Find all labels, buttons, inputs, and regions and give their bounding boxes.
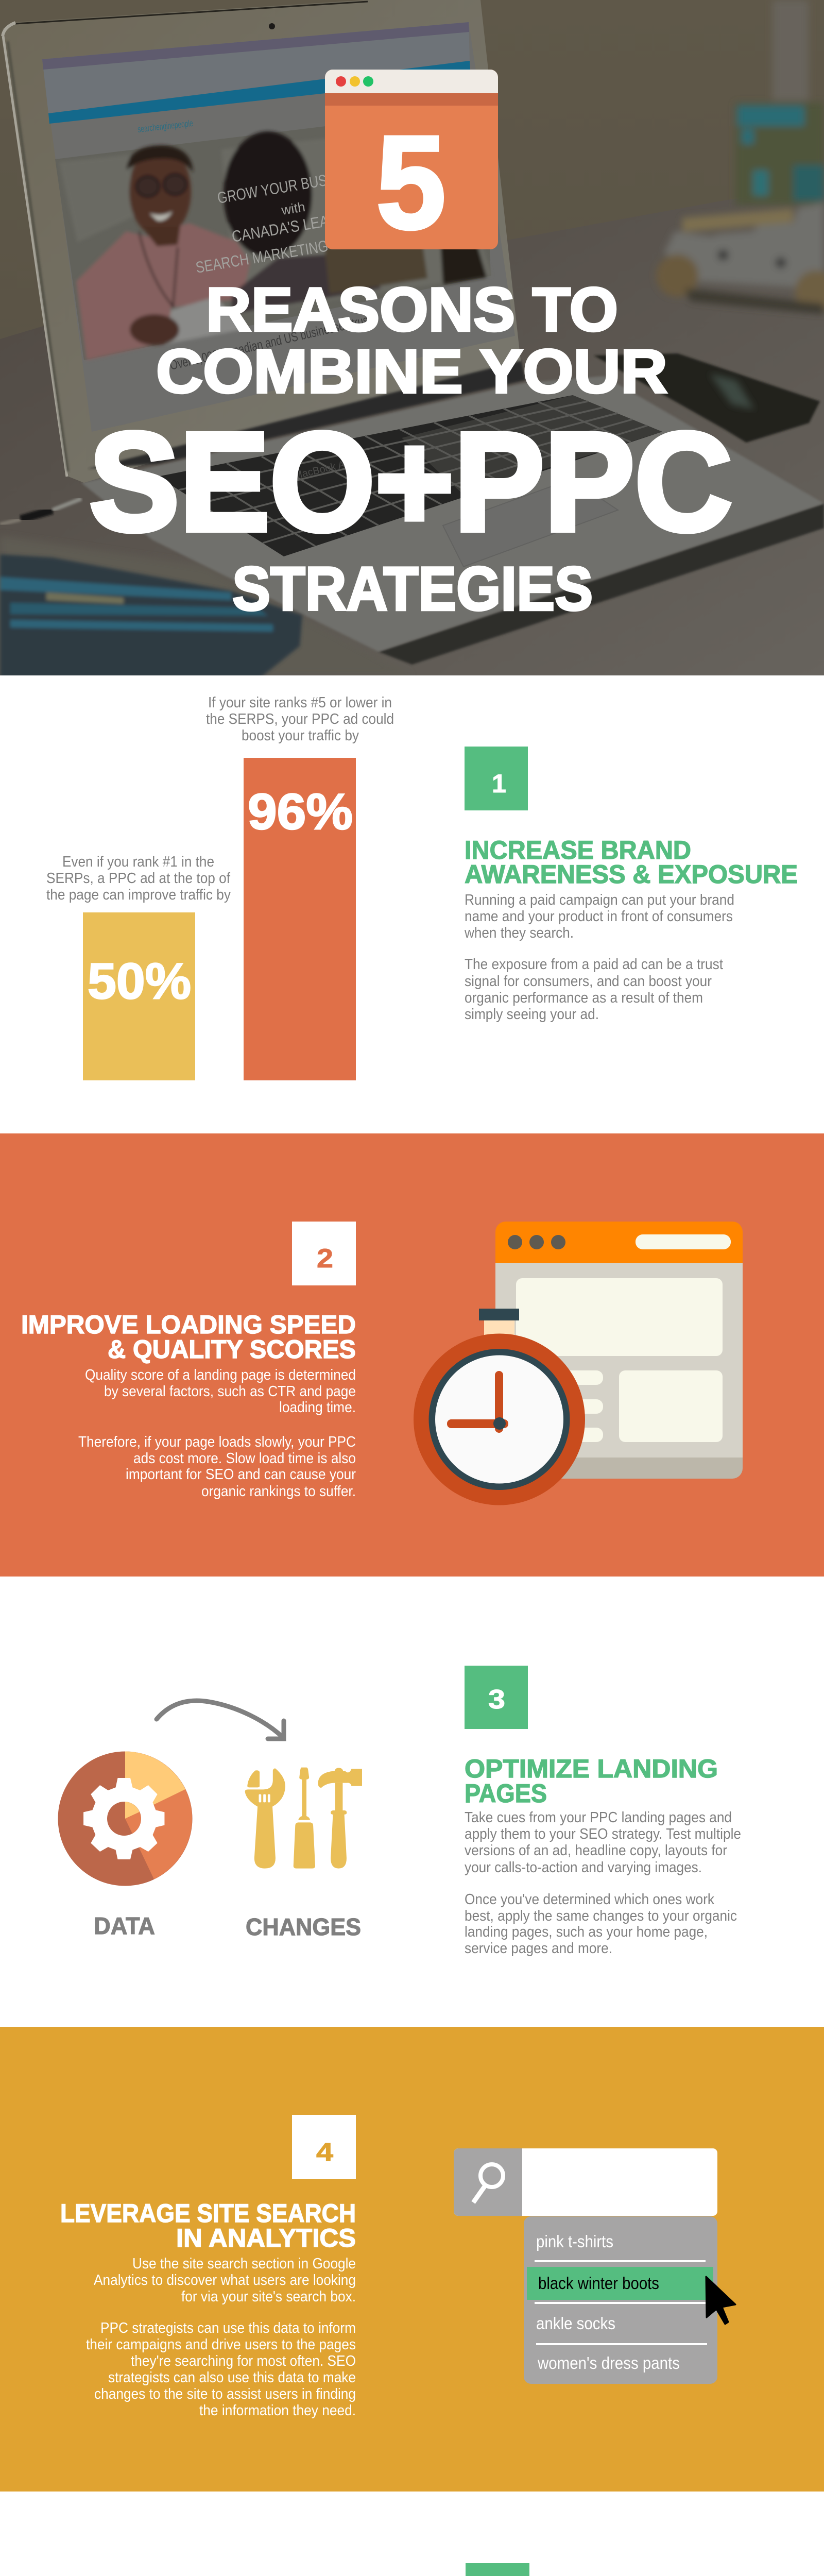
search suggestions dropdown: women's dress pants (537, 2353, 680, 2372)
search suggestions dropdown: ankle socks (536, 2314, 615, 2333)
icon: browser window (495, 1222, 743, 1479)
caption: 50%: Even if you rank #1 in the (62, 854, 214, 870)
text block: service pages and more. (465, 1940, 612, 1957)
text block: landing pages, such as your home page, (465, 1924, 708, 1940)
screen text: with (280, 199, 306, 218)
title: SEO+PPC (89, 403, 732, 560)
heading: IMPROVE LOADING SPEED (21, 1310, 356, 1339)
text block: Analytics to discover what users are looking (94, 2272, 356, 2289)
hero background photo: laptop on a desk (0, 0, 824, 680)
text block: loading time. (279, 1399, 356, 1416)
screen text: CANADA'S LEA (230, 212, 330, 246)
caption: 96%: boost your traffic by (242, 727, 359, 744)
text block: Once you've determined which ones work (465, 1891, 714, 1908)
section background (0, 2027, 824, 2492)
label: data: DATA (94, 1912, 155, 1939)
screen text: Over 1,000 Canadian and US businesses trust (168, 312, 373, 373)
caption: 96%: If your site ranks #5 or lower in (208, 694, 392, 711)
heading: PAGES (465, 1779, 547, 1808)
heading (60, 2199, 356, 2252)
search box (454, 2148, 717, 2216)
caption: 50%: the page can improve traffic by (46, 887, 231, 903)
laptop screen (42, 22, 515, 482)
number badge 2: 2 (317, 1244, 333, 1274)
heading: INCREASE BRAND (465, 836, 691, 865)
text block: changes to the site to assist users in finding (94, 2386, 356, 2402)
title: STRATEGIES (232, 554, 593, 623)
caption: 96% (206, 694, 394, 744)
bottle (772, 0, 809, 100)
panel: reason 3 (0, 1577, 824, 2027)
panel: reason 2 (0, 1133, 824, 1577)
caption: 96%: the SERPS, your PPC ad could (206, 711, 394, 727)
text block: Quality score of a landing page is determined (85, 1367, 356, 1383)
search suggestions dropdown: black winter boots (538, 2274, 659, 2293)
notebook and pen (0, 554, 302, 680)
text block (78, 1367, 356, 1500)
heading: OPTIMIZE LANDING (465, 1754, 718, 1783)
text block: the information they need. (199, 2402, 356, 2419)
text block: name and your product in front of consumers (465, 908, 733, 925)
text block: for via your site's search box. (181, 2289, 356, 2305)
heading: LEVERAGE SITE SEARCH (60, 2199, 356, 2228)
heading (465, 1754, 718, 1808)
section background (0, 1133, 824, 1577)
toy cannon (664, 202, 824, 289)
bar: 96% (244, 758, 356, 1080)
search suggestions dropdown: pink t-shirts (536, 2232, 613, 2251)
text block: versions of an ad, headline copy, layouts for (465, 1842, 727, 1859)
text block (465, 1809, 741, 1957)
panel: reason 1 (0, 675, 824, 1133)
caption: 50%: SERPs, a PPC ad at the top of (46, 870, 231, 887)
trackpad (443, 479, 618, 567)
person from behind (224, 131, 312, 257)
text block: your calls-to-action and varying images. (465, 1859, 702, 1876)
bar: 96%: 96% (248, 783, 353, 840)
bar: 50% (83, 912, 195, 1080)
icon: data pie with gear (58, 1752, 193, 1886)
text block (464, 892, 734, 1023)
number badge 1: 1 (492, 769, 506, 798)
number 5: 5 (376, 108, 446, 257)
text block: organic performance as a result of them (465, 990, 703, 1006)
number badge 2 (292, 1222, 356, 1285)
label: changes: CHANGES (246, 1913, 361, 1940)
text block: signal for consumers, and can boost your (465, 973, 712, 990)
screen text (137, 118, 373, 482)
panel: reason 4 (0, 2027, 824, 2492)
number badge 3: 3 (488, 1685, 505, 1715)
text block: PPC strategists can use this data to inform (100, 2320, 356, 2336)
text block: they're searching for most often. SEO (131, 2353, 356, 2369)
panel: hero (0, 0, 824, 680)
section background (0, 675, 824, 1133)
icon: cursor (706, 2277, 735, 2324)
title: COMBINE YOUR (156, 337, 667, 406)
text block: strategists can also use this data to make (108, 2369, 356, 2386)
text block: by several factors, such as CTR and page (104, 1383, 356, 1400)
screen text: MacBook Air (293, 457, 352, 482)
heading: AWARENESS & EXPOSURE (465, 860, 798, 889)
caption: 50% (46, 854, 231, 903)
number badge 1 (465, 747, 528, 810)
heading (21, 1310, 356, 1364)
number badge 5 (466, 2563, 529, 2576)
text block: Take cues from your PPC landing pages and (465, 1809, 732, 1826)
laptop base (379, 503, 824, 665)
icon: browser window with number 5 (325, 70, 498, 257)
heading: & QUALITY SCORES (108, 1335, 356, 1364)
phone (594, 353, 820, 443)
screen text: SEARCH MARKETING (194, 236, 330, 277)
section background (0, 2492, 824, 2576)
text block: simply seeing your ad. (465, 1006, 599, 1023)
camera (269, 23, 275, 29)
icon: stopwatch (414, 1309, 585, 1505)
cable (0, 519, 21, 524)
number badge 4: 4 (316, 2138, 333, 2166)
text block (86, 2256, 356, 2419)
panel: reason 5 (0, 2492, 824, 2576)
icon: magnifier (473, 2164, 503, 2202)
laptop lid (3, 0, 521, 483)
text block: Therefore, if your page loads slowly, your PPC (78, 1434, 356, 1450)
title: REASONS TO (206, 275, 618, 344)
text block: Running a paid campaign can put your brand (465, 892, 734, 908)
icon: tools (245, 1768, 362, 1869)
text block: their campaigns and drive users to the pages (86, 2336, 356, 2353)
text block: apply them to your SEO strategy. Test multiple (465, 1826, 741, 1842)
text block: Use the site search section in Google (132, 2256, 356, 2272)
keyboard (158, 395, 662, 556)
text block: ads cost more. Slow load time is also (133, 1450, 356, 1467)
section background (0, 1577, 824, 2027)
bar: 50%: 50% (88, 953, 191, 1009)
screen text: GROW YOUR BUS (216, 171, 328, 207)
person in pink shirt (76, 223, 250, 360)
title (89, 275, 732, 623)
heading: IN ANALYTICS (176, 2224, 356, 2252)
arrow (157, 1701, 284, 1739)
text block: best, apply the same changes to your organic (465, 1908, 737, 1924)
heading (465, 836, 798, 889)
text block: organic rankings to suffer. (201, 1483, 356, 1500)
text block: important for SEO and can cause your (126, 1466, 356, 1483)
bar chart (46, 694, 394, 1080)
number badge 3 (465, 1666, 528, 1729)
screen text: searchenginepeople (137, 118, 194, 134)
number badge 4 (292, 2115, 356, 2179)
text block: when they search. (464, 925, 574, 941)
search suggestions dropdown (524, 2216, 717, 2384)
text block: The exposure from a paid ad can be a trust (465, 956, 723, 973)
